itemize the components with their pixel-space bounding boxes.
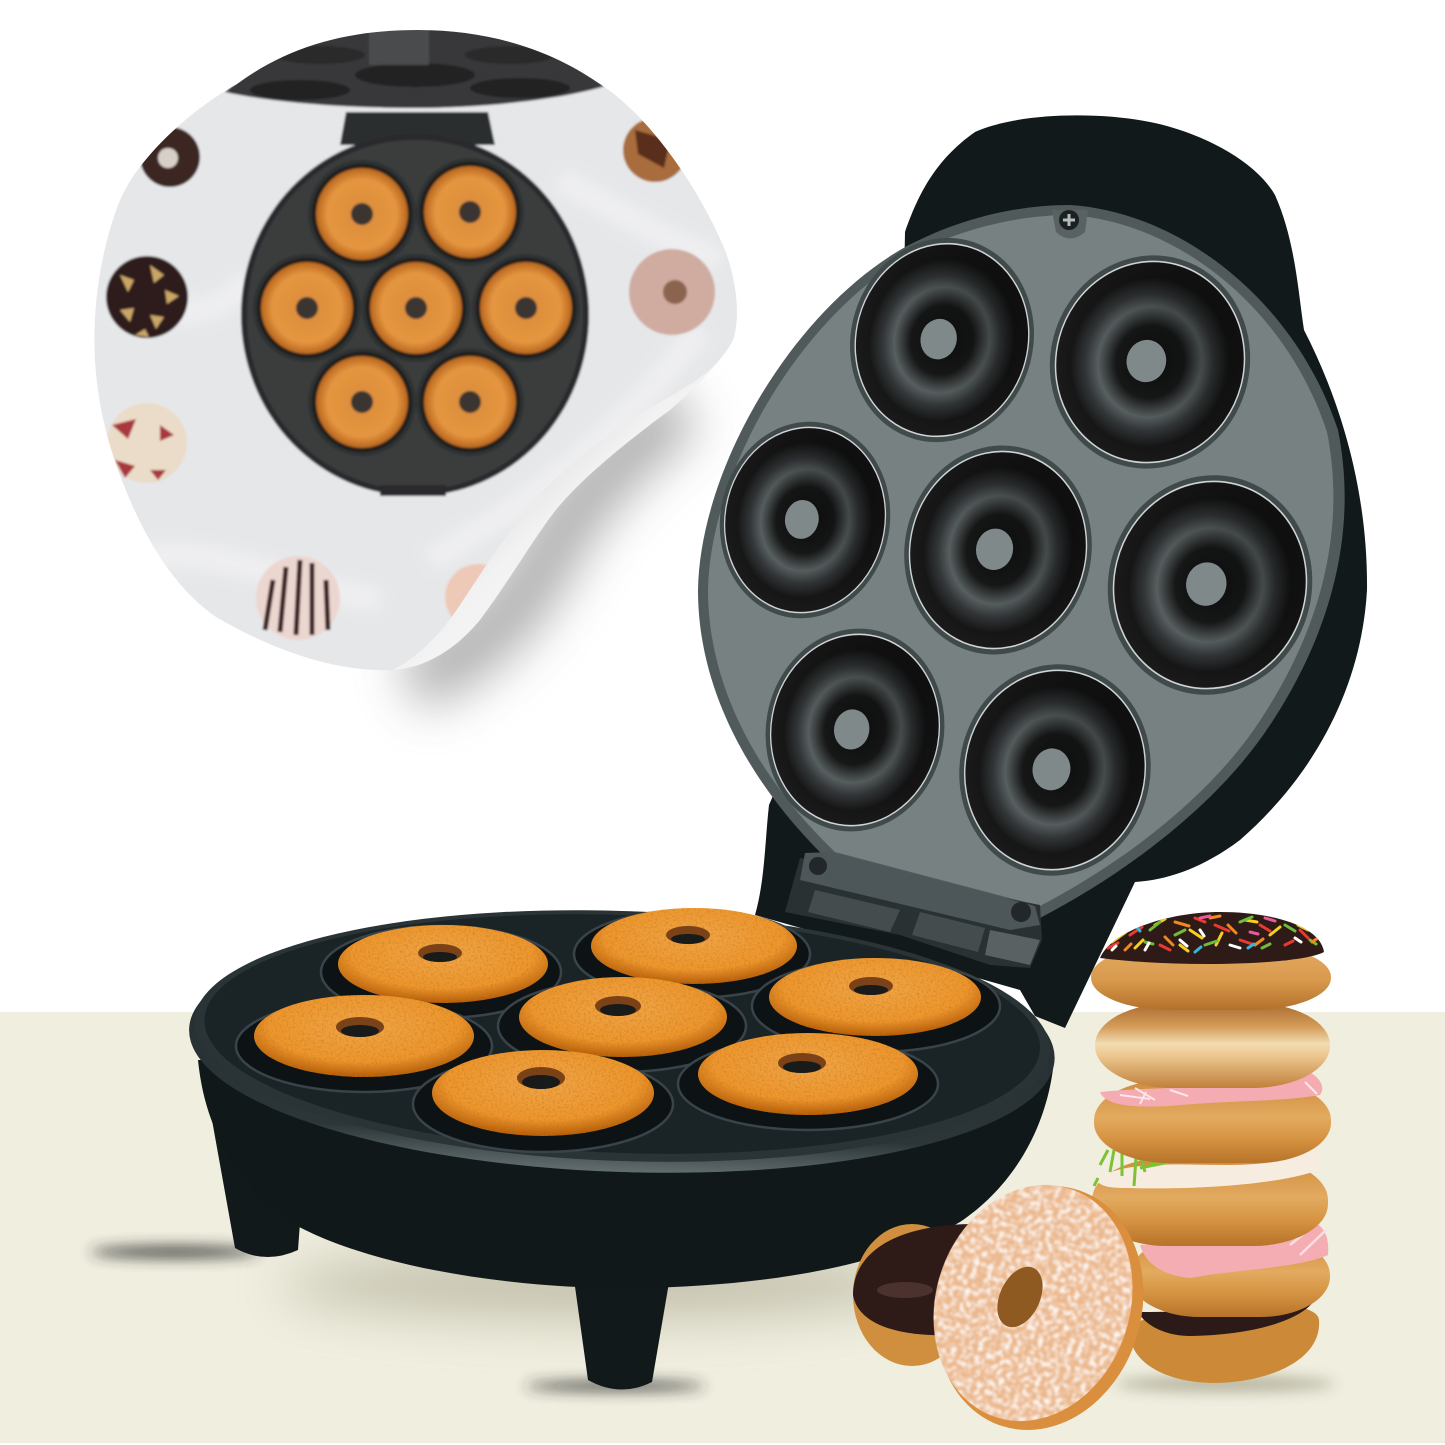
plain donut bbox=[1095, 1003, 1330, 1088]
rear leg bbox=[212, 1120, 302, 1257]
baked donuts bbox=[254, 908, 981, 1136]
lid plate bbox=[698, 205, 1345, 918]
sprinkles bbox=[1108, 915, 1318, 952]
pink sprinkled donut bbox=[1094, 1072, 1331, 1163]
sticker: peeling photo of the donut maker bbox=[90, 25, 740, 682]
chocolate donut on floor bbox=[853, 1224, 975, 1366]
sticker: side donuts bbox=[106, 118, 715, 640]
base wells bbox=[236, 910, 1000, 1152]
pink donut bbox=[1130, 1215, 1330, 1317]
stack shadow bbox=[1115, 1376, 1335, 1392]
donut stack bbox=[1091, 912, 1335, 1392]
bottom chocolate donut bbox=[1130, 1290, 1319, 1383]
sprinkle chocolate donut bbox=[1091, 912, 1331, 1010]
sugar donut bbox=[904, 1159, 1174, 1445]
donut holes bbox=[336, 926, 893, 1089]
lid back housing bbox=[755, 115, 1367, 1028]
sticker: open maker bbox=[241, 134, 589, 496]
sticker: lid at top bbox=[225, 25, 605, 108]
lid wells bbox=[704, 217, 1335, 891]
green sprinkles bbox=[1094, 1150, 1170, 1186]
front leg bbox=[572, 1265, 672, 1390]
white iced donut bbox=[1092, 1150, 1328, 1246]
donut maker bbox=[90, 115, 1367, 1391]
base top plate bbox=[185, 896, 1059, 1187]
hinge bbox=[785, 852, 1042, 968]
sticker photo bbox=[90, 25, 740, 675]
lid screw bbox=[1052, 210, 1088, 238]
sticker shadow bbox=[410, 405, 680, 682]
floor shadows bbox=[90, 1246, 920, 1391]
base body bbox=[198, 1060, 1054, 1288]
donut bodies bbox=[254, 908, 981, 1136]
sticker: hinge bbox=[340, 112, 495, 145]
sticker: curled flap bbox=[394, 365, 715, 670]
